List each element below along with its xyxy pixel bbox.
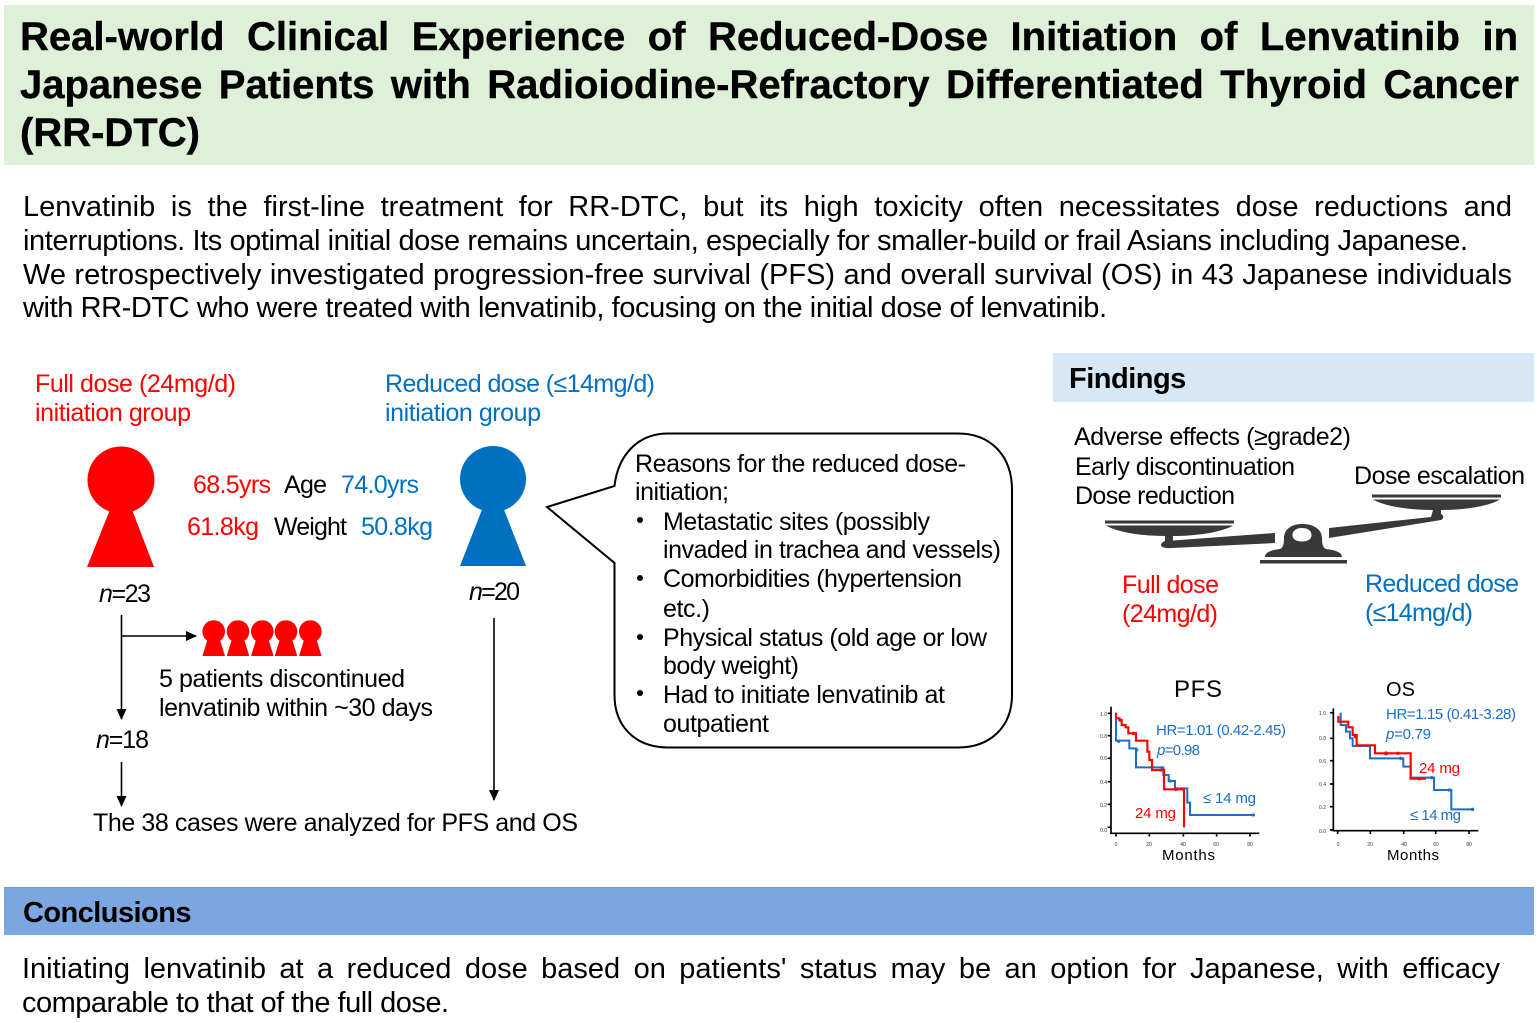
icon: red person full dose [87, 446, 154, 567]
chart: PFS Kaplan-Meier: 0.6 [1100, 756, 1107, 762]
OS heading: OS [1386, 679, 1415, 701]
reduced dose group heading: Reduced dose (≤14mg/d) [385, 370, 655, 398]
PFS heading: PFS [1174, 676, 1222, 703]
weight comparison: 61.8kg [187, 513, 259, 541]
chart: PFS Kaplan-Meier: 40 [1180, 842, 1186, 848]
chart: OS Kaplan-Meier: 0.0 [1319, 829, 1326, 835]
weight comparison [187, 513, 433, 541]
callout: reasons for reduced dose: etc.) [663, 595, 710, 623]
background text block [22, 191, 1512, 324]
adverse findings list [1074, 423, 1351, 510]
chart: OS Kaplan-Meier: 1.0 [1319, 711, 1326, 717]
age comparison: 68.5yrs [193, 471, 271, 499]
chart: PFS Kaplan-Meier: 0.4 [1100, 780, 1107, 786]
callout: reasons for reduced dose: Physical status (old age or low [663, 624, 988, 652]
scale label: full dose: (24mg/d) [1122, 600, 1218, 628]
conclusions text: comparable to that of the full dose. [22, 987, 449, 1019]
title text: (RR-DTC) [20, 111, 200, 155]
icon: blue person reduced dose [460, 446, 526, 566]
icon: five discontinued patients [202, 620, 322, 656]
adverse findings list: Early discontinuation [1075, 453, 1295, 481]
title text [20, 15, 1519, 155]
arrow: n=20 to analysis [493, 618, 495, 800]
chart: OS Kaplan-Meier: ≤ 14 mg [1410, 807, 1461, 824]
arrow: to discontinued patients [122, 635, 196, 637]
chart: PFS Kaplan-Meier: 20 [1146, 842, 1152, 848]
chart: PFS Kaplan-Meier: 24 mg [1135, 805, 1176, 822]
title text: Real-world Clinical Experience of Reduced-Dose Initiation of Lenvatinib in [20, 15, 1518, 59]
chart: PFS Kaplan-Meier: p=0.98 [1156, 742, 1200, 759]
chart: OS Kaplan-Meier: 20 [1367, 842, 1373, 848]
adverse findings list: Adverse effects (≥grade2) [1074, 423, 1351, 451]
n=23 label: n=23 [99, 580, 151, 608]
background text block: We retrospectively investigated progression-free survival (PFS) and overall survival (OS) in 43 Japanese individuals [23, 259, 1512, 291]
chart: PFS Kaplan-Meier: 0.2 [1100, 803, 1107, 809]
chart: PFS Kaplan-Meier: 0.0 [1100, 828, 1107, 834]
chart: PFS Kaplan-Meier: ≤ 14 mg [1203, 790, 1256, 807]
age comparison: Age [284, 471, 327, 499]
callout: reasons for reduced dose [547, 434, 1012, 748]
chart: PFS Kaplan-Meier: 0.8 [1100, 734, 1107, 740]
chart: OS Kaplan-Meier: 0.4 [1319, 782, 1326, 788]
callout: reasons for reduced dose: Metastatic sites (possibly [663, 508, 930, 536]
chart: OS Kaplan-Meier: 0.8 [1319, 736, 1326, 742]
adverse findings list: Dose reduction [1075, 482, 1235, 510]
chart: PFS Kaplan-Meier: 0 [1115, 842, 1118, 848]
arrow: n=18 to analysis [120, 762, 122, 806]
full dose group heading [35, 370, 236, 427]
chart: OS Kaplan-Meier: 60 [1433, 842, 1439, 848]
conclusions heading [4, 887, 1534, 935]
weight comparison: 50.8kg [361, 513, 433, 541]
chart: PFS Kaplan-Meier [1100, 707, 1286, 864]
background text block: interruptions. Its optimal initial dose remains uncertain, especially for smaller-build or frail Asians including Japanese. [23, 225, 1468, 257]
conclusions text: Initiating lenvatinib at a reduced dose based on patients' status may be an option for Japanese, with efficacy [22, 953, 1500, 985]
chart: OS Kaplan-Meier: 0 [1337, 842, 1340, 848]
age comparison [193, 471, 419, 499]
callout: reasons for reduced dose: Comorbidities (hypertension [663, 565, 962, 593]
background text block: with RR-DTC who were treated with lenvatinib, focusing on the initial dose of lenvatinib. [22, 292, 1107, 324]
scale label: reduced dose: (≤14mg/d) [1365, 599, 1473, 627]
chart: OS Kaplan-Meier: 24 mg [1419, 760, 1460, 777]
callout: reasons for reduced dose: body weight) [663, 652, 799, 680]
scale label: reduced dose: Reduced dose [1365, 570, 1519, 598]
chart: PFS Kaplan-Meier: 1.0 [1100, 712, 1107, 718]
chart: PFS Kaplan-Meier: 60 [1213, 842, 1219, 848]
chart: PFS Kaplan-Meier: 80 [1247, 842, 1253, 848]
chart: OS Kaplan-Meier: 80 [1466, 842, 1472, 848]
full dose group heading: Full dose (24mg/d) [35, 370, 236, 398]
chart: PFS Kaplan-Meier: Months [1162, 847, 1215, 864]
callout: reasons for reduced dose: invaded in trachea and vessels) [663, 536, 1001, 564]
chart: OS Kaplan-Meier [1319, 706, 1516, 864]
scale label: reduced dose [1365, 570, 1519, 627]
scale label: full dose [1122, 571, 1219, 628]
title banner [4, 5, 1534, 165]
reduced dose group heading [385, 370, 655, 427]
weight comparison: Weight [274, 513, 347, 541]
conclusions text [22, 953, 1500, 1019]
background text block: Lenvatinib is the first-line treatment for RR-DTC, but its high toxicity often necessitates dose reductions and [23, 191, 1512, 223]
discontinuation note [159, 665, 433, 722]
full dose group heading: initiation group [35, 399, 191, 427]
callout: reasons for reduced dose: initiation; [635, 478, 729, 506]
dose escalation label: Dose escalation [1354, 462, 1525, 490]
n=18 label: n=18 [96, 726, 149, 754]
chart: OS Kaplan-Meier: 0.2 [1319, 805, 1326, 811]
discontinuation note: 5 patients discontinued [159, 665, 405, 693]
callout: reasons for reduced dose: Had to initiate lenvatinib at [663, 681, 945, 709]
reduced dose group heading: initiation group [385, 399, 541, 427]
chart: OS Kaplan-Meier: p=0.79 [1385, 726, 1431, 743]
chart: PFS Kaplan-Meier: HR=1.01 (0.42-2.45) [1156, 722, 1286, 739]
chart: OS Kaplan-Meier: 0.6 [1319, 759, 1326, 765]
scale label: full dose: Full dose [1122, 571, 1219, 599]
analysis note: The 38 cases were analyzed for PFS and OS [93, 809, 578, 837]
icon: balance scale tilted to full dose [1105, 494, 1501, 564]
chart: OS Kaplan-Meier: Months [1387, 847, 1439, 864]
title text: Japanese Patients with Radioiodine-Refractory Differentiated Thyroid Cancer [20, 63, 1519, 107]
callout: reasons for reduced dose: Reasons for the reduced dose- [635, 450, 966, 478]
arrow: full dose down to n=18 [120, 615, 122, 719]
conclusions heading: Conclusions [23, 897, 191, 929]
callout: reasons for reduced dose: outpatient [663, 710, 769, 738]
chart: OS Kaplan-Meier: HR=1.15 (0.41-3.28) [1386, 706, 1516, 723]
discontinuation note: lenvatinib within ~30 days [159, 694, 433, 722]
age comparison: 74.0yrs [341, 471, 419, 499]
findings heading [1053, 353, 1534, 402]
chart: OS Kaplan-Meier: 40 [1401, 842, 1407, 848]
n=20 label: n=20 [469, 578, 520, 606]
findings heading: Findings [1069, 363, 1186, 395]
